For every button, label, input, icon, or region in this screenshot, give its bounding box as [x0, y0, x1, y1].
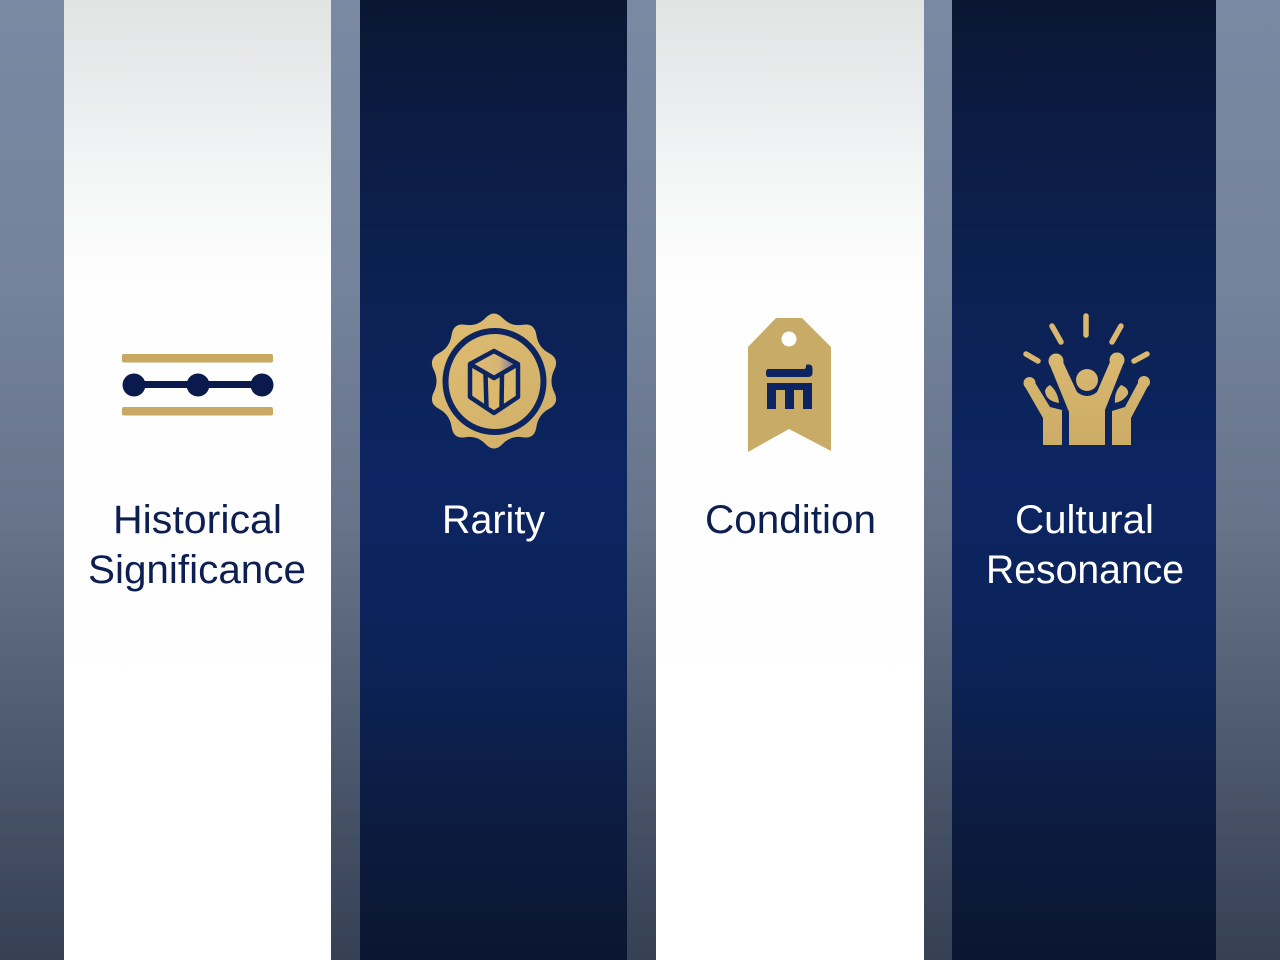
label: rarity: Rarity: [442, 498, 545, 542]
icon: cheering crowd: [1024, 316, 1150, 445]
panel: rarity: [360, 0, 627, 960]
label: historical significance: [88, 498, 306, 592]
icon: rosette with cube: [432, 313, 556, 449]
label: cultural resonance: Resonance: [986, 548, 1184, 592]
icon: grading tag: [748, 318, 831, 452]
label: historical significance: Significance: [88, 548, 306, 592]
label: condition: Condition: [705, 498, 876, 542]
panel: condition: [656, 0, 924, 960]
panel: cultural resonance: [952, 0, 1216, 960]
panel: historical significance: [64, 0, 331, 960]
label: historical significance: Historical: [113, 498, 282, 542]
label: cultural resonance: [986, 498, 1184, 592]
label: cultural resonance: Cultural: [1015, 498, 1154, 542]
icon: timeline: [122, 354, 274, 416]
